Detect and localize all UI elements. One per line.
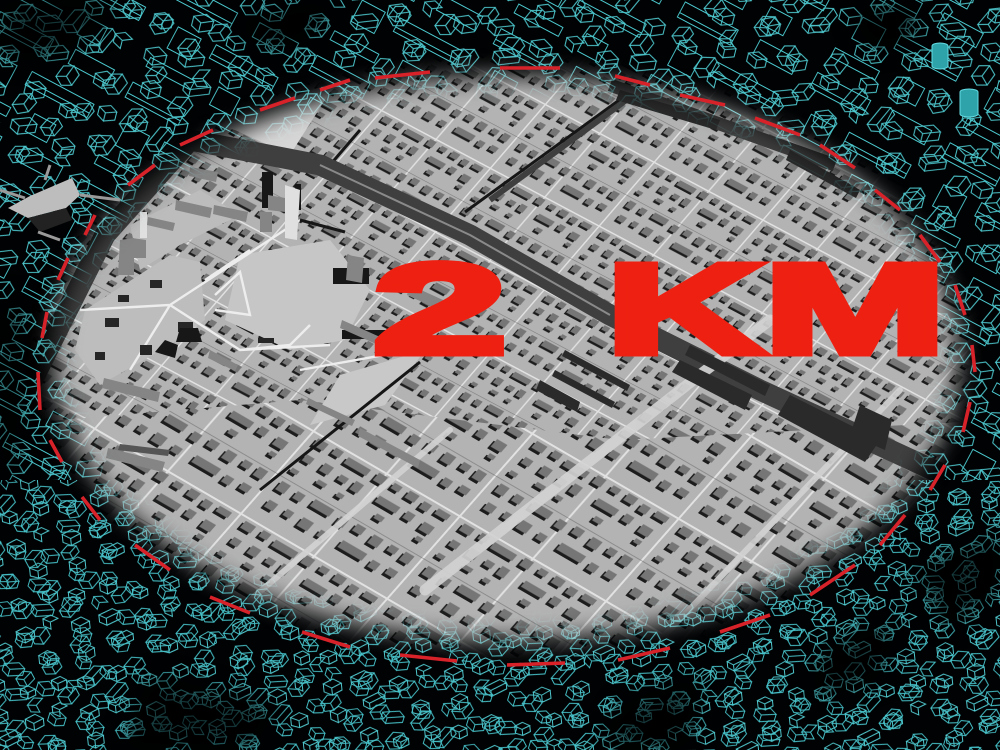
small houses, upper part xyxy=(37,58,972,440)
long blocks, right of centre xyxy=(536,90,892,462)
blank open areas xyxy=(75,78,425,425)
black street lines xyxy=(260,85,640,490)
pale diagonal avenues xyxy=(250,320,900,640)
main dark road xyxy=(30,85,955,480)
dashed red circle boundary xyxy=(38,68,975,665)
icon: cylindrical towers xyxy=(932,43,978,117)
drone icon xyxy=(0,165,120,240)
road lines in the open area xyxy=(80,219,382,372)
title: 2 KM xyxy=(373,238,946,381)
title: 2 KM: 2 xyxy=(373,238,507,381)
larger houses, lower part xyxy=(48,400,962,658)
spotlight map area xyxy=(36,58,976,660)
small buildings in the open area xyxy=(95,280,274,360)
title: 2 KM: KM xyxy=(606,238,946,381)
apartment blocks, left district xyxy=(102,167,465,472)
